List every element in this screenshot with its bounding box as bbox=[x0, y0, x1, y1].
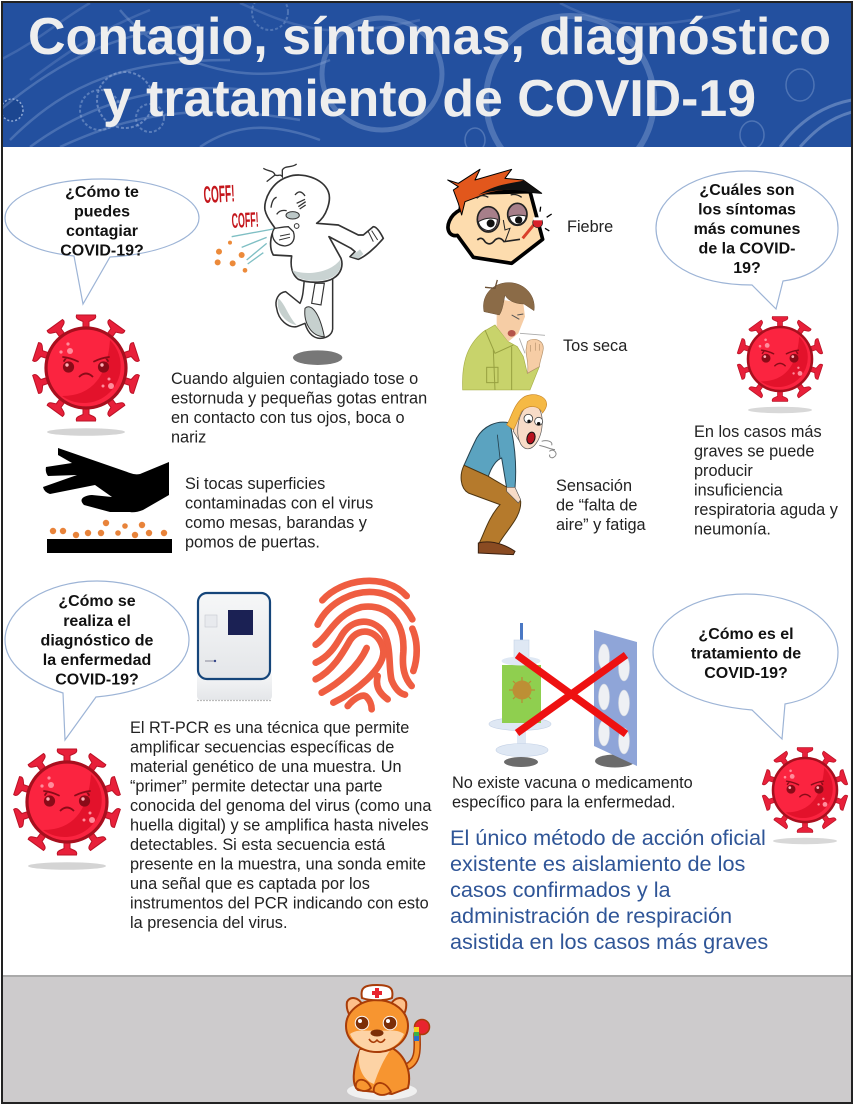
text: official action method: casos confirmados y la bbox=[450, 877, 672, 902]
label: shortness of breath: de “falta de bbox=[556, 496, 637, 514]
text: contaminated surfaces: como mesas, barandas y bbox=[185, 514, 368, 532]
virus character 3 bbox=[14, 749, 120, 870]
text: contaminated surfaces: pomos de puertas. bbox=[185, 534, 320, 552]
text: severe cases: neumonía. bbox=[694, 520, 771, 538]
icon: feverish face bbox=[448, 169, 552, 263]
icon: crossed-out vaccine and pills bbox=[489, 623, 637, 768]
icon: hand touching surface bbox=[43, 448, 172, 553]
text: RT-PCR explanation: instrumentos del PCR indicando con esto bbox=[130, 894, 429, 912]
icon: fingerprint bbox=[316, 581, 417, 709]
title: y tratamiento de COVID-19 bbox=[103, 70, 756, 128]
speech bubble: how to catch: ¿Cómo te bbox=[65, 184, 139, 201]
speech bubble: symptoms: más comunes bbox=[694, 221, 800, 238]
virus character 4 bbox=[762, 748, 848, 844]
text: RT-PCR explanation: una señal que es captada por los bbox=[130, 875, 370, 893]
icon: PCR machine bbox=[197, 593, 272, 700]
text: RT-PCR explanation: El RT-PCR es una técnica que permite bbox=[130, 719, 409, 737]
text: severe cases: producir bbox=[694, 462, 753, 480]
text: cough transmission: Cuando alguien contagiado tose o bbox=[171, 370, 418, 388]
text: no vaccine: específico para la enfermedad. bbox=[452, 794, 676, 812]
text: severe cases: En los casos más bbox=[694, 423, 822, 441]
text: RT-PCR explanation: la presencia del virus. bbox=[130, 914, 287, 932]
text: official action method: existente es aislamiento de los bbox=[450, 851, 746, 876]
title: Contagio, síntomas, diagnóstico bbox=[28, 8, 831, 66]
speech bubble: symptoms: ¿Cuáles son bbox=[699, 182, 795, 199]
text: RT-PCR explanation: presente en la muestra, una sonda emite bbox=[130, 856, 426, 874]
text: contaminated surfaces: Si tocas superficies bbox=[185, 475, 325, 493]
icon: man with dry cough bbox=[463, 280, 545, 390]
speech bubble: diagnosis bbox=[5, 581, 189, 740]
text: RT-PCR explanation: detectables. Si esta secuencia está bbox=[130, 836, 386, 854]
speech bubble: symptoms: de la COVID- bbox=[699, 240, 795, 258]
text: no vaccine: No existe vacuna o medicamento bbox=[452, 774, 693, 792]
speech bubble: treatment: COVID-19? bbox=[704, 665, 788, 682]
speech bubble: symptoms: 19? bbox=[733, 260, 761, 277]
text: severe cases: insuficiencia bbox=[694, 482, 784, 500]
speech bubble: diagnosis: diagnóstico de bbox=[41, 632, 154, 650]
text: RT-PCR explanation: material genético de una muestra. Un bbox=[130, 758, 402, 776]
virus character 1 bbox=[33, 315, 139, 436]
text: RT-PCR explanation: huella digital) y se amplifica hasta niveles bbox=[130, 816, 429, 834]
text: official action method: asistida en los casos más graves bbox=[450, 929, 768, 954]
text: severe cases: respiratoria aguda y bbox=[694, 501, 839, 519]
text: contaminated surfaces: contaminadas con el virus bbox=[185, 494, 373, 512]
speech bubble: how to catch: puedes bbox=[74, 204, 130, 220]
speech bubble: treatment: ¿Cómo es el bbox=[698, 626, 794, 643]
coughing figure illustration: COFF! bbox=[203, 180, 235, 209]
icon: nurse lion mascot bbox=[346, 985, 430, 1100]
speech bubble: how to catch bbox=[5, 179, 199, 304]
text: RT-PCR explanation: “primer” permite detectar una parte bbox=[130, 778, 382, 796]
coughing figure illustration bbox=[203, 164, 383, 365]
virus character 2 bbox=[737, 317, 823, 413]
label: fever: Fiebre bbox=[567, 218, 613, 236]
speech bubble: diagnosis: realiza el bbox=[63, 613, 131, 630]
speech bubble: how to catch: contagiar bbox=[66, 223, 138, 240]
text: severe cases: graves se puede bbox=[694, 442, 814, 460]
speech bubble: diagnosis: la enfermedad bbox=[43, 652, 151, 669]
speech bubble: symptoms bbox=[656, 171, 838, 309]
speech bubble: diagnosis: COVID-19? bbox=[55, 672, 139, 688]
speech bubble: treatment bbox=[653, 594, 838, 739]
label: shortness of breath: Sensación bbox=[556, 477, 632, 495]
text: cough transmission: estornuda y pequeñas gotas entran bbox=[171, 390, 427, 408]
text: RT-PCR explanation: amplificar secuencias específicas de bbox=[130, 738, 394, 756]
footer band bbox=[3, 975, 852, 1103]
speech bubble: symptoms: los síntomas bbox=[698, 202, 796, 218]
speech bubble: how to catch: COVID-19? bbox=[60, 242, 144, 260]
text: cough transmission: en contacto con tus ojos, boca o bbox=[171, 409, 405, 427]
icon: man short of breath bbox=[461, 395, 556, 555]
label: shortness of breath: aire” y fatiga bbox=[556, 516, 647, 534]
speech bubble: treatment: tratamiento de bbox=[691, 646, 801, 662]
coughing figure illustration: COFF! bbox=[231, 209, 259, 233]
text: RT-PCR explanation: conocida del genoma del virus (como una bbox=[130, 797, 432, 815]
header banner bbox=[3, 3, 851, 147]
speech bubble: diagnosis: ¿Cómo se bbox=[58, 593, 136, 610]
text: official action method: El único método de acción oficial bbox=[450, 825, 766, 850]
label: dry cough: Tos seca bbox=[563, 337, 628, 355]
text: cough transmission: nariz bbox=[171, 428, 206, 446]
text: official action method: administración de respiración bbox=[450, 903, 732, 928]
